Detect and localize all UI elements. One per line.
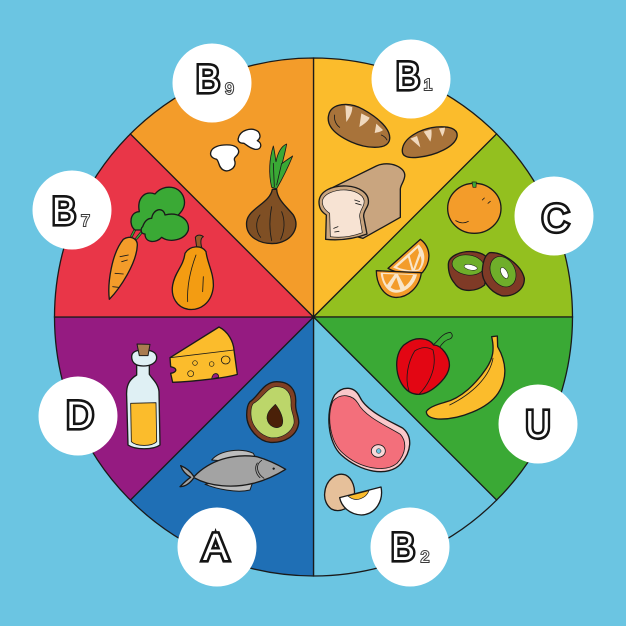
icon: sliced bread (319, 164, 405, 240)
label: B7 (32, 170, 112, 250)
foods: B9 and B7 quadrant (109, 129, 296, 309)
icon: orange (448, 182, 501, 233)
foods: B1 and C quadrant (319, 104, 524, 297)
label: B2 (370, 508, 450, 586)
label: C (514, 176, 594, 256)
label: B9 (172, 44, 252, 122)
icon: fish (180, 450, 286, 491)
icon: eggs (325, 474, 382, 515)
label: B1: 1 (424, 77, 433, 94)
label: D (38, 376, 118, 456)
label: B2: B (391, 527, 415, 569)
label: B7: B (52, 191, 76, 233)
label: B1 (372, 40, 450, 118)
icon: small bread loaf (402, 127, 457, 158)
label: D: D (66, 395, 94, 437)
icon: kiwi halves (448, 252, 524, 296)
icon: carrot (109, 237, 137, 299)
label: A: A (203, 527, 229, 569)
pie wheel (54, 58, 572, 576)
icon: avocado (247, 382, 299, 442)
icon: orange slices (376, 239, 429, 297)
icon: leafy greens (131, 187, 188, 241)
label: B2: 2 (421, 549, 430, 566)
icon: large bread loaf (328, 104, 390, 147)
foods: U and B2 quadrant (325, 332, 505, 515)
icon: banana (426, 336, 505, 419)
label: B7: 7 (81, 213, 90, 230)
label: A (178, 508, 256, 586)
icon: red pepper (397, 332, 452, 394)
label: U: U (526, 404, 550, 446)
icon: onion (247, 144, 296, 244)
label: B9: 9 (225, 81, 234, 98)
icon: cheese wedge (170, 327, 237, 382)
icon: pear (172, 235, 213, 309)
foods: D and A quadrant (127, 327, 299, 491)
icon: steak (329, 388, 410, 472)
icon: oil bottle (127, 344, 160, 449)
label: B1: B (396, 56, 420, 98)
label: U (498, 384, 578, 464)
label: B9: B (196, 59, 220, 101)
icon: mushrooms (211, 129, 261, 171)
label: C: C (542, 198, 569, 240)
